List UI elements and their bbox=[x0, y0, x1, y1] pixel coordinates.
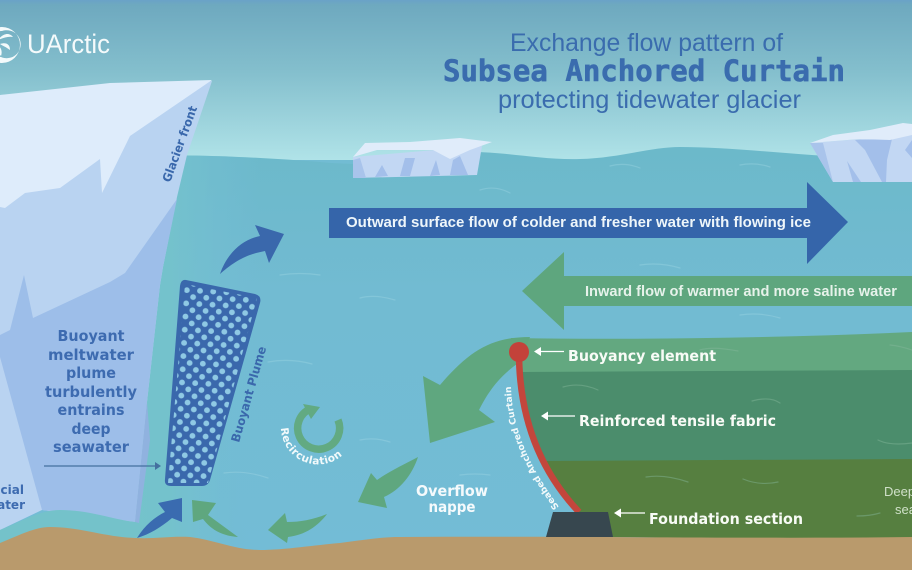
foundation section bbox=[546, 512, 613, 537]
plume description text: plume bbox=[66, 364, 116, 382]
foundation section callout: Foundation section bbox=[649, 510, 803, 528]
plume description text: deep bbox=[72, 420, 110, 438]
ripples in green layers bbox=[563, 345, 912, 516]
glacier front label: Glacier front bbox=[160, 104, 200, 184]
overflow nappe label: nappe bbox=[428, 498, 476, 516]
logo wordmark: UArctic bbox=[27, 29, 110, 59]
water ripples bbox=[224, 164, 780, 478]
UArctic logo bbox=[0, 27, 110, 63]
outward flow label: Outward surface flow of colder and fresher water with flowing ice bbox=[346, 214, 811, 231]
title bbox=[443, 29, 845, 114]
seabed flow arrow left bbox=[192, 500, 238, 537]
overflow nappe label bbox=[416, 482, 488, 516]
iceberg right bbox=[810, 123, 912, 182]
blue rising plume arrow bbox=[220, 225, 284, 274]
sky background bbox=[0, 0, 912, 160]
plume description text: turbulently bbox=[45, 383, 137, 401]
plume description text: Buoyant bbox=[58, 327, 125, 345]
iceberg left bbox=[353, 138, 492, 178]
glacier light top bbox=[0, 80, 212, 208]
deep seawater label cropped at edge bbox=[884, 484, 912, 517]
teal water beside glacier bbox=[136, 404, 176, 538]
seabed flow arrow right bbox=[268, 513, 327, 543]
plume description text: entrains bbox=[58, 401, 124, 419]
water under glacier bbox=[0, 510, 150, 548]
glacial water label cropped at edge bbox=[0, 483, 25, 512]
curtain fabric bbox=[519, 352, 579, 512]
glacier shadow face bbox=[0, 199, 177, 522]
overflow nappe label: Overflow bbox=[416, 482, 488, 500]
green water layers behind curtain bbox=[511, 332, 912, 540]
logo mark bbox=[0, 27, 21, 63]
recirculation label: Recirculation bbox=[280, 428, 342, 464]
overflow flow arrow lower bbox=[358, 457, 418, 508]
buoyancy element callout: Buoyancy element bbox=[568, 347, 716, 365]
blue inflow arrow at plume base bbox=[137, 498, 182, 538]
glacier base strip bbox=[135, 402, 150, 523]
plume description text bbox=[45, 327, 137, 456]
reinforced tensile fabric callout: Reinforced tensile fabric bbox=[579, 412, 776, 430]
inward flow arrow bbox=[522, 252, 912, 330]
sea water bbox=[0, 147, 912, 570]
seabed anchored curtain label: Seabed Anchored Curtain bbox=[504, 387, 558, 510]
title line three: protecting tidewater glacier bbox=[498, 86, 801, 114]
middle layer bbox=[520, 370, 912, 462]
arrow to plume bbox=[44, 462, 161, 470]
inward flow label: Inward flow of warmer and more saline water bbox=[585, 283, 897, 300]
large curved overflow arrow bbox=[423, 337, 530, 443]
seabed bbox=[0, 527, 912, 570]
title line two: Subsea Anchored Curtain bbox=[443, 54, 845, 88]
buoyant plume label: Buoyant Plume bbox=[228, 345, 269, 444]
lower layer bbox=[543, 459, 912, 540]
upper layer bbox=[511, 332, 912, 376]
glacier bbox=[0, 80, 212, 530]
buoyancy element bbox=[509, 342, 529, 362]
title line one: Exchange flow pattern of bbox=[510, 29, 783, 57]
plume description text: seawater bbox=[53, 438, 129, 456]
plume description text: meltwater bbox=[48, 346, 134, 364]
recirculation icon bbox=[298, 404, 340, 449]
glacier mid tone body bbox=[0, 81, 212, 530]
buoyant plume bbox=[164, 280, 260, 486]
outward surface flow arrow bbox=[329, 182, 848, 264]
